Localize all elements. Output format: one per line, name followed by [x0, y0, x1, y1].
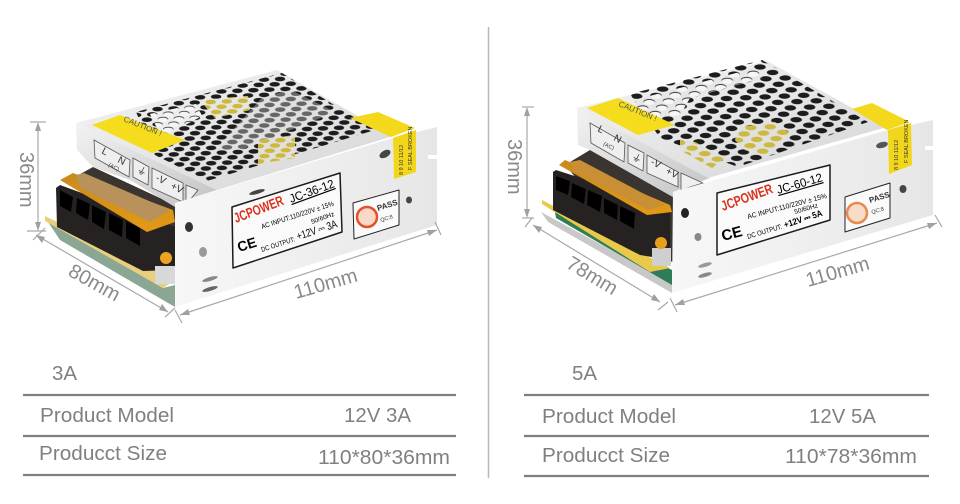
product label: 50/60Hz	[794, 203, 819, 216]
table: 5A specs	[524, 395, 929, 476]
table: 3A specs: 110*80*36mm	[318, 446, 450, 469]
product label: +12V ⎓ 3A	[295, 218, 339, 243]
terminal tab text	[596, 124, 680, 182]
terminal tab text: L	[596, 124, 606, 136]
pass label: QC:8	[380, 214, 394, 224]
product label: +12V ⎓ 5A	[783, 208, 824, 230]
pass label	[353, 190, 399, 239]
table: 3A specs: 12V 3A	[344, 404, 411, 427]
seal sticker: F SEAL BROKEN	[904, 119, 910, 163]
top cover	[76, 70, 393, 190]
shadowed interior	[73, 167, 175, 270]
product label: JCPOWER	[719, 180, 775, 214]
product photo: 3A power supply	[45, 70, 438, 307]
product photo: 5A power supply	[541, 60, 934, 293]
orange terminal cover	[60, 173, 175, 232]
seal sticker: F SEAL BROKEN	[408, 126, 414, 170]
terminal tab text: +V	[664, 166, 680, 182]
terminal tab text: N	[116, 155, 127, 168]
product label: DC OUTPUT:	[260, 236, 296, 254]
dimension: 36mm: 36mm	[503, 139, 525, 195]
dimension: 36mm	[15, 122, 46, 231]
pass label: PASS	[376, 198, 399, 213]
mounting holes	[681, 141, 906, 279]
dimension: 78mm	[525, 218, 668, 310]
product label: CE	[720, 223, 744, 245]
dimension: 36mm	[503, 107, 534, 218]
trimmer potentiometer	[155, 252, 175, 284]
product label: AC INPUT:110/220V ± 15%	[260, 201, 335, 231]
dimension: 110mm	[670, 215, 942, 312]
product label	[717, 165, 830, 255]
terminal tab text: -V	[649, 157, 663, 171]
product label: JC-36-12	[287, 176, 336, 206]
mounting holes	[185, 148, 412, 293]
terminal tab text: L	[100, 146, 110, 158]
pass label: QC:8	[871, 206, 885, 216]
terminal tab text: N	[612, 133, 623, 146]
caution sticker: CAUTION !	[617, 100, 658, 123]
terminal tab text: -V	[154, 173, 168, 187]
terminal tab text: ⏚	[135, 164, 149, 179]
dimension: 110mm	[175, 222, 441, 323]
product label: CE	[235, 234, 258, 255]
terminal block	[56, 185, 175, 271]
ear notch	[925, 146, 934, 150]
terminal tab text: ⏚	[630, 151, 644, 166]
terminal tab text: (AC)	[107, 162, 120, 173]
PCB and base plate	[541, 200, 672, 293]
terminal block	[553, 170, 670, 260]
table: 5A specs: 12V 5A	[809, 405, 876, 428]
dimension: 110mm: 110mm	[803, 253, 872, 292]
terminal tab text: (AC)	[602, 141, 615, 152]
seal sticker	[350, 112, 416, 179]
front face	[672, 120, 933, 293]
product label: 50/60Hz	[310, 211, 335, 226]
panel: 5A product	[503, 60, 942, 476]
table: 3A specs: Producct Size	[39, 442, 167, 465]
dimension: 80mm	[33, 228, 175, 317]
trimmer potentiometer	[652, 237, 671, 266]
table: 3A specs: Product Model	[40, 404, 174, 427]
dimension: 110mm: 110mm	[291, 265, 360, 304]
center divider	[488, 27, 490, 478]
dimension: 78mm: 78mm	[562, 252, 621, 300]
front face	[175, 127, 437, 307]
product label: JCPOWER	[231, 192, 286, 226]
caution sticker	[587, 98, 675, 135]
panel: 3A product	[15, 70, 456, 475]
dimension: 80mm: 80mm	[65, 260, 124, 306]
product label	[231, 173, 342, 268]
pass label	[845, 183, 891, 232]
heading: 3A: 3A	[52, 362, 77, 385]
table: 5A specs: Producct Size	[542, 444, 670, 467]
seal sticker	[852, 103, 912, 174]
table: 5A specs: Product Model	[542, 405, 676, 428]
ear notch	[428, 155, 438, 159]
side wall	[76, 123, 217, 207]
product label: DC OUTPUT:	[747, 224, 783, 241]
caution sticker: CAUTION !	[122, 115, 163, 138]
product label: AC INPUT:110/220V ± 15%	[747, 193, 828, 221]
heading: 5A: 5A	[572, 362, 597, 385]
terminal tab text	[100, 146, 185, 197]
orange terminal cover	[559, 160, 672, 215]
seal sticker: 8 9 10 11/12	[894, 140, 900, 170]
caution sticker	[92, 115, 185, 153]
terminal tabs	[94, 140, 198, 204]
dimension: 36mm: 36mm	[15, 152, 37, 208]
product label: JC-60-12	[775, 170, 824, 197]
table: 3A specs	[23, 395, 456, 475]
seal sticker: 8 9 10 11/12	[399, 145, 405, 175]
shadowed interior	[565, 150, 673, 262]
pass label: PASS	[868, 190, 891, 205]
PCB and base plate	[45, 216, 175, 307]
side wall	[577, 108, 710, 197]
terminal tabs	[590, 123, 703, 191]
table: 5A specs: 110*78*36mm	[785, 445, 917, 468]
terminal tab text: +V	[169, 181, 185, 197]
top cover	[577, 60, 887, 178]
